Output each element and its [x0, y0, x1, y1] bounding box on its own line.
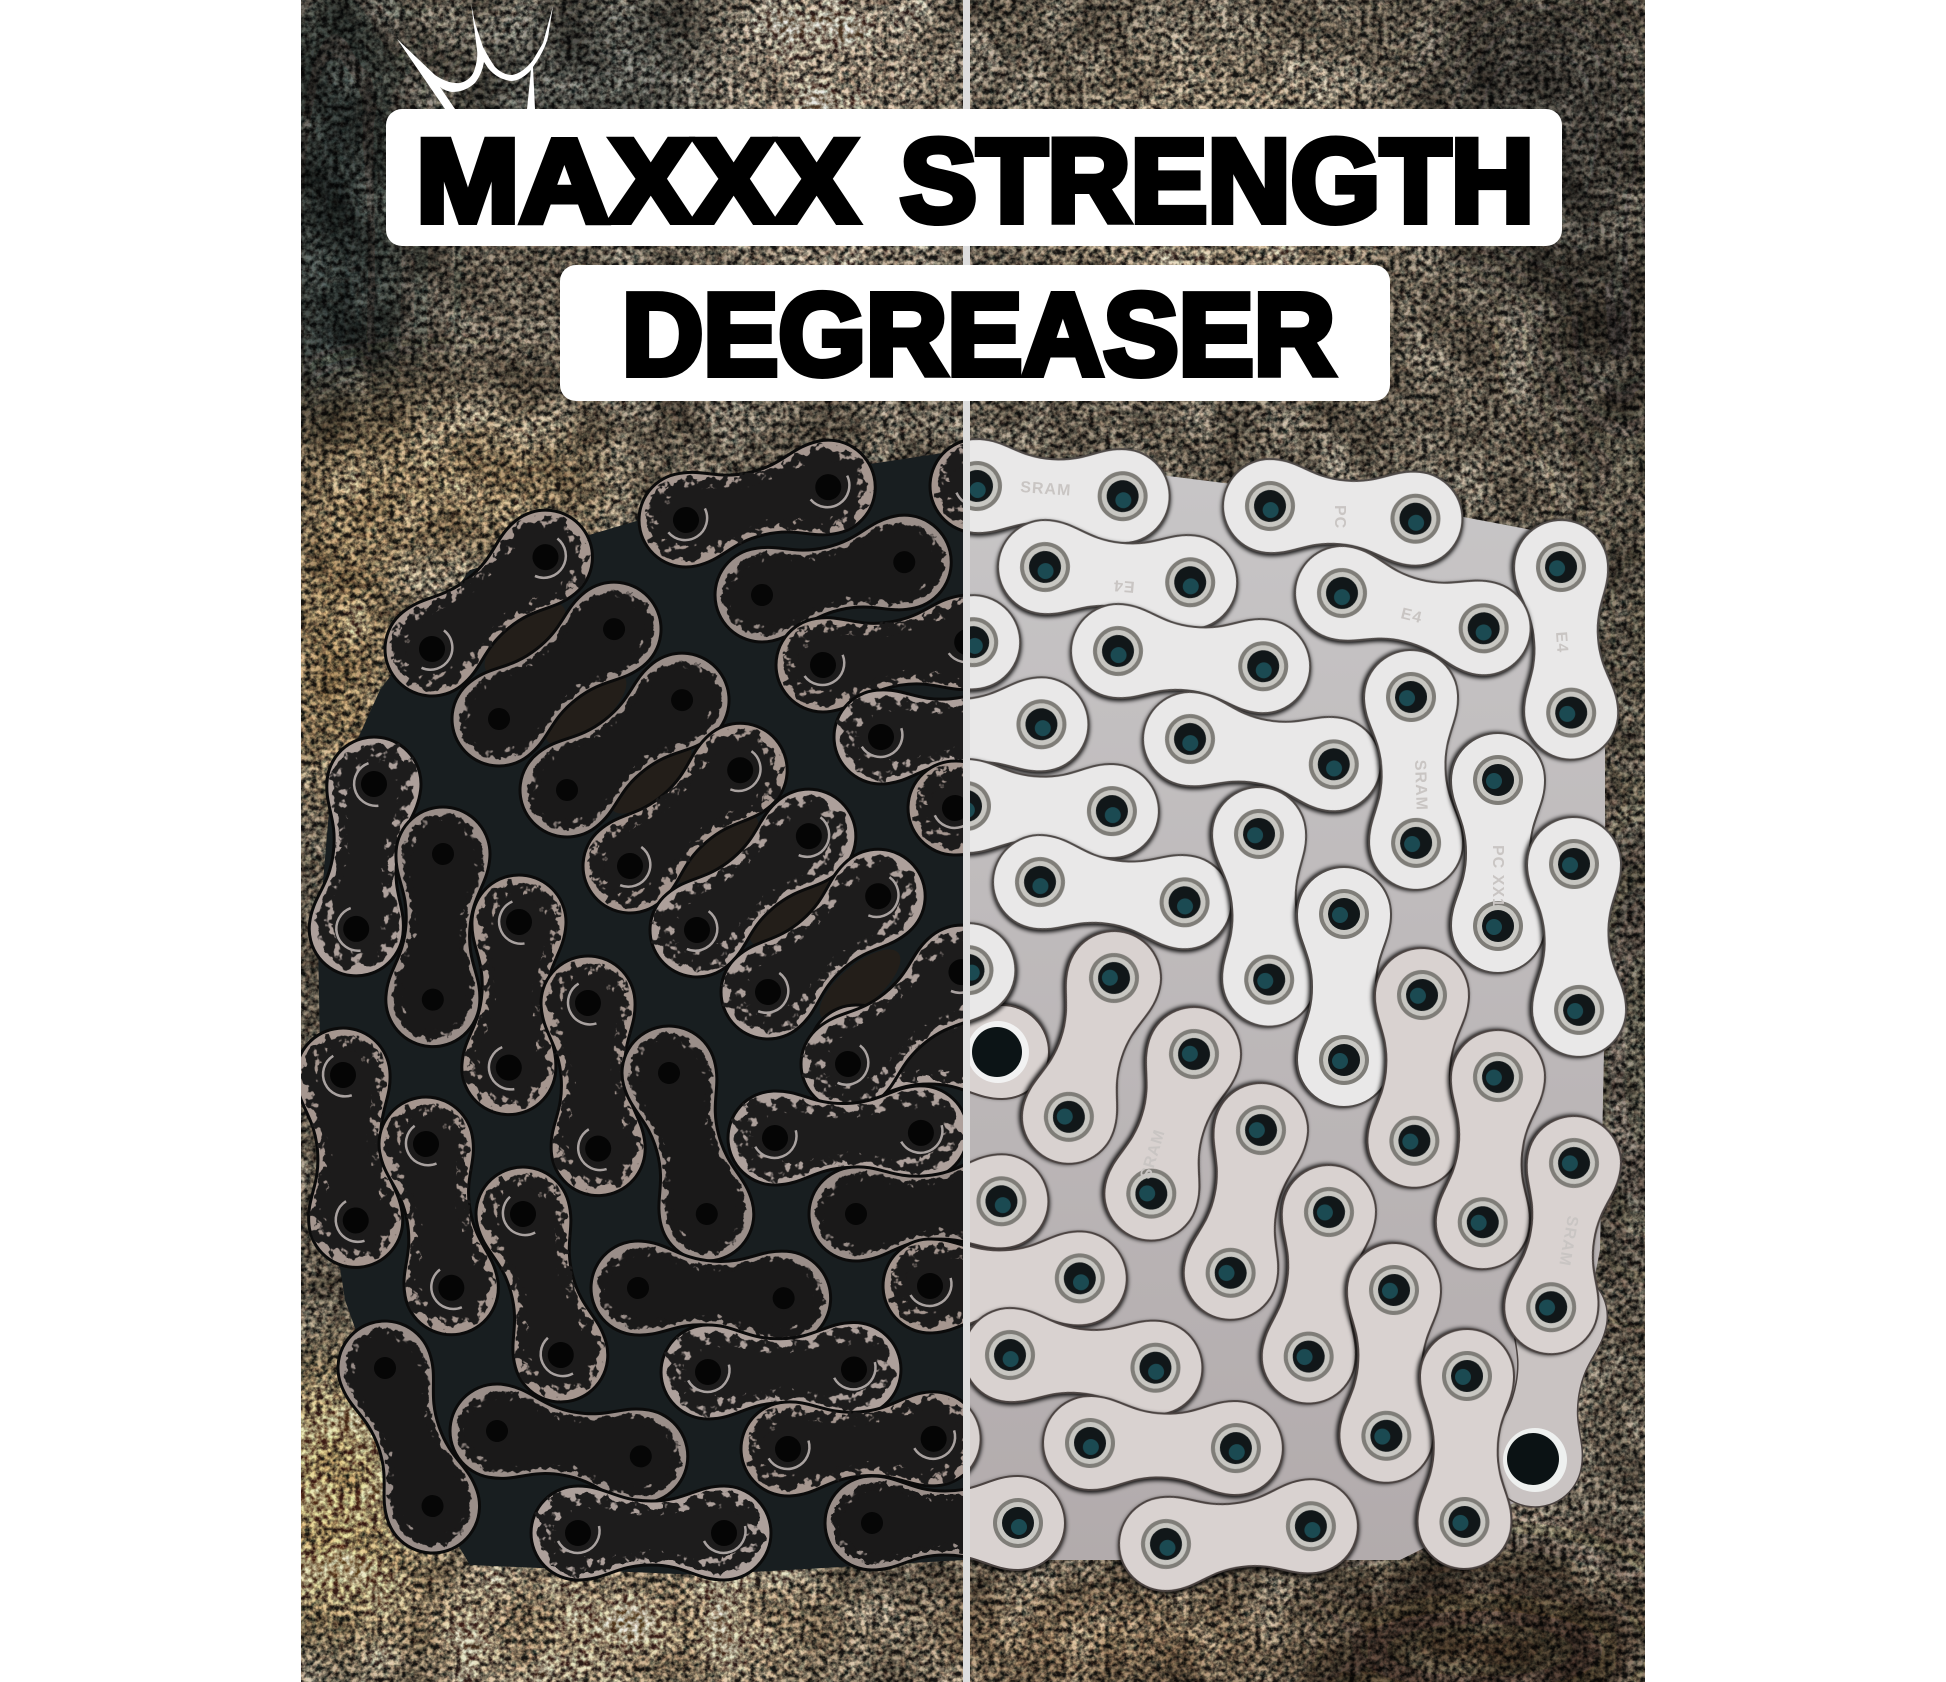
panel: before, dirty chain (left half)	[301, 438, 963, 1582]
stamped link markings	[1020, 479, 1581, 1268]
infographic canvas	[301, 0, 1645, 1682]
dirty inner plates	[318, 450, 963, 1575]
stamped link markings: E4	[1552, 631, 1570, 654]
stamped link markings: E4	[1399, 605, 1424, 627]
title line 1: MAXXX STRENGTH: MAXXX	[416, 116, 858, 248]
large open hole on first clean link stub	[967, 1021, 1029, 1083]
stamped link markings: PC XX1	[1489, 845, 1506, 908]
stamped link markings: SRAM	[1138, 1127, 1169, 1181]
big open hole inner plate	[1498, 1286, 1608, 1508]
icon: white crown logo	[397, 3, 553, 109]
clean outer link plates	[738, 436, 1628, 1596]
divider line between before and after	[963, 0, 970, 1682]
photo background: gritty stone texture	[240, 0, 1690, 1682]
clean inner plates	[963, 450, 1605, 1560]
stamped link markings: SRAM	[1411, 760, 1430, 811]
stamped link markings: PC	[1331, 505, 1348, 529]
title line 1: MAXXX STRENGTH	[386, 109, 1562, 248]
title line 2: DEGREASER: DEGREASER	[622, 270, 1335, 400]
stamped link markings: E4	[1112, 576, 1135, 595]
panel: after, clean chain (right half)	[970, 437, 1628, 1597]
stamped link markings: SRAM	[1555, 1214, 1581, 1268]
dirty outer link plates	[292, 431, 1173, 1580]
title line 1: MAXXX STRENGTH: STRENGTH	[900, 116, 1534, 248]
dirt visible in chain gaps	[474, 592, 911, 1032]
stamped link markings: SRAM	[1020, 479, 1072, 500]
